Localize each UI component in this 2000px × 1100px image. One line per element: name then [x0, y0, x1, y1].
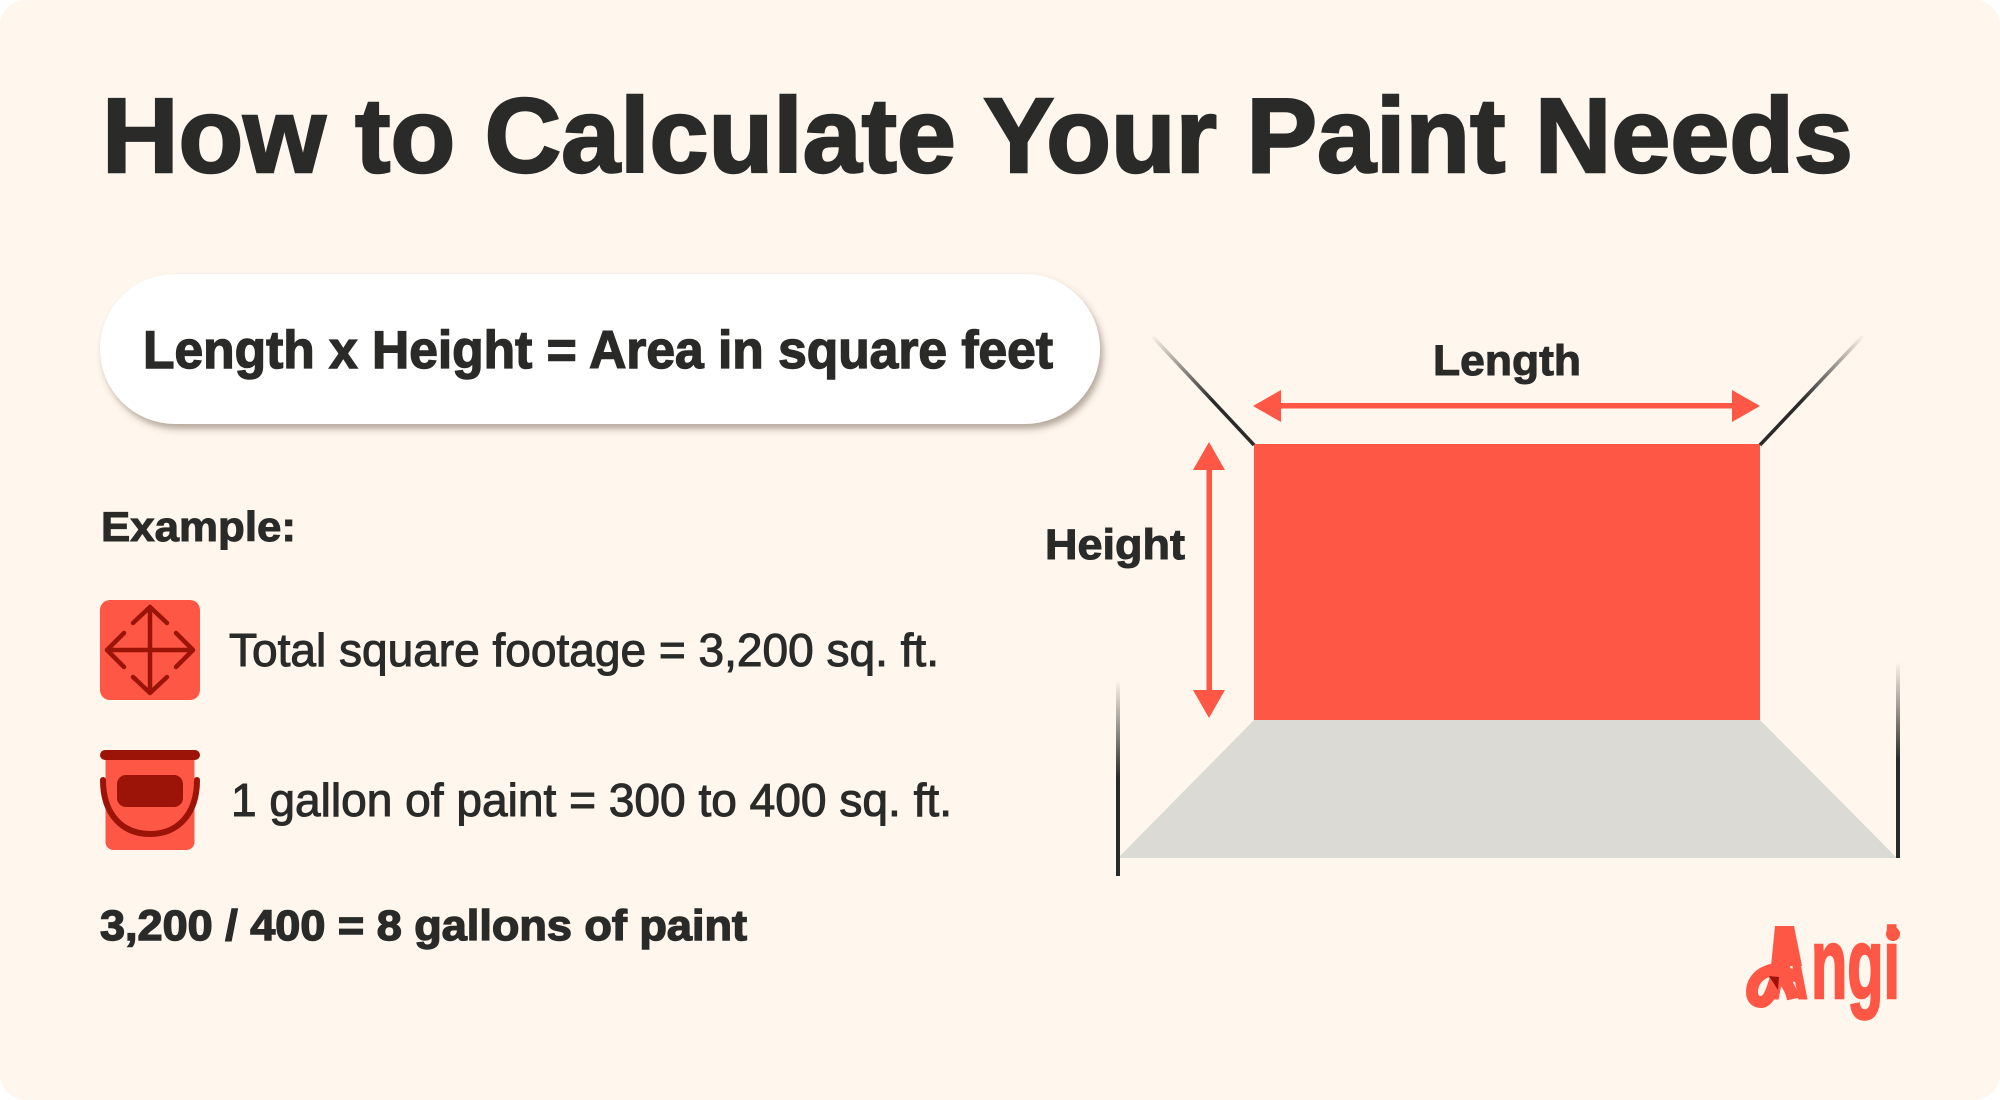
logo: Angi: A: [1769, 908, 1808, 1020]
formula pill: [100, 274, 1100, 424]
logo: Angi: ngi: [1811, 908, 1900, 1020]
square footage text: Total square footage = 3,200 sq. ft.: [229, 624, 939, 676]
left corner line: [1116, 680, 1120, 876]
example heading: Example:: [101, 503, 296, 550]
height arrow: [1193, 442, 1225, 718]
paint coverage text: 1 gallon of paint = 300 to 400 sq. ft.: [231, 774, 952, 826]
formula pill: Length x Height = Area in square feet: [143, 321, 1053, 380]
right corner line: [1896, 662, 1900, 858]
height label: Height: [1045, 521, 1185, 569]
result text: 3,200 / 400 = 8 gallons of paint: [100, 902, 747, 950]
right ceiling line: [1760, 336, 1863, 445]
length arrow: [1253, 390, 1760, 422]
left ceiling line: [1152, 336, 1254, 445]
room diagram: [1045, 336, 1900, 876]
floor: [1118, 720, 1897, 858]
back wall: [1254, 444, 1760, 720]
logo: Angi: [1752, 908, 1900, 1020]
icon: square footage arrows: [100, 600, 200, 700]
length label: Length: [1433, 337, 1581, 385]
icon: paint bucket: [100, 750, 200, 850]
title: How to Calculate Your Paint Needs: [102, 77, 1853, 195]
